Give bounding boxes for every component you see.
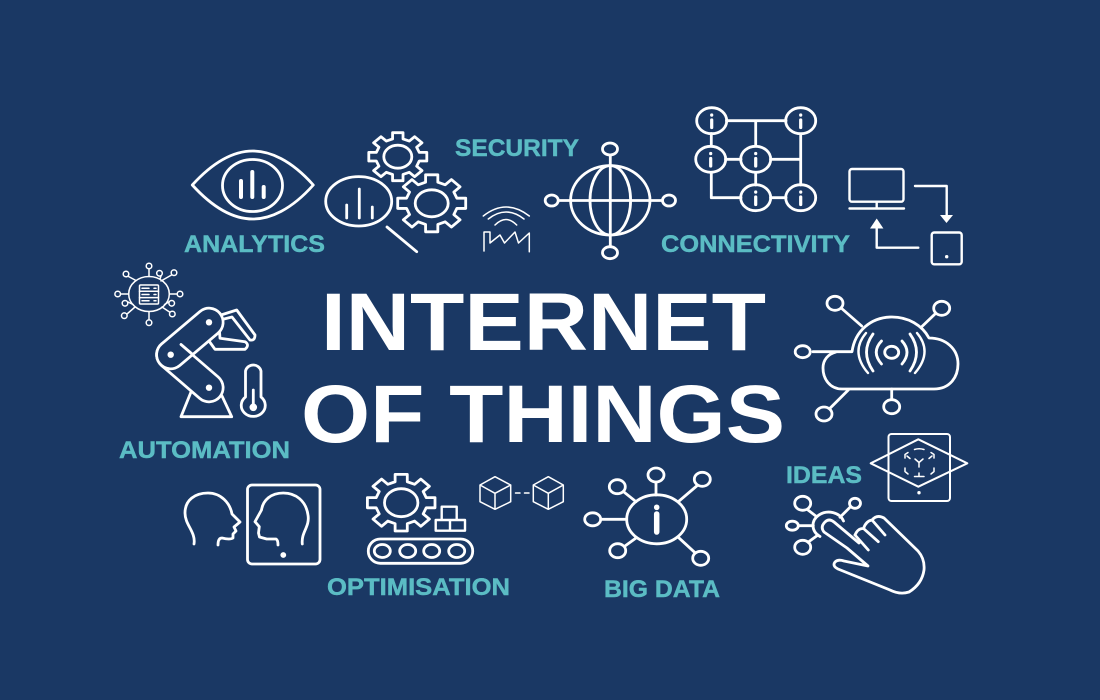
icon: large gear: [398, 175, 466, 232]
icon: smart factory: [483, 207, 529, 252]
title: INTERNET: [321, 277, 766, 368]
label: automation: AUTOMATION: [119, 437, 290, 464]
icon: globe with nodes: [545, 143, 676, 259]
icon: magnifier with bar chart: [326, 177, 417, 252]
title: OF THINGS: [301, 369, 785, 460]
icon: eye with bar chart: [192, 151, 313, 219]
label: connectivity: CONNECTIVITY: [661, 231, 850, 258]
icon: framed head on tablet: [248, 485, 320, 564]
label: analytics: ANALYTICS: [184, 231, 325, 258]
icon: thermometer: [241, 365, 265, 416]
icon: linked cubes: [480, 477, 563, 509]
label: security: SECURITY: [455, 135, 579, 162]
label: big data: BIG DATA: [604, 576, 720, 603]
icon: connected info network: [696, 108, 816, 211]
label: ideas: IDEAS: [786, 462, 862, 489]
icon: human head profile: [185, 493, 240, 545]
title: [301, 277, 785, 460]
icon: gear on conveyor belt with boxes: [367, 474, 473, 563]
icon: big data hub: [585, 468, 710, 565]
icon: cloud with signal: [795, 296, 958, 421]
label: optimisation: OPTIMISATION: [327, 574, 510, 601]
icon: tablet with diamond: [871, 434, 967, 501]
icon: robot arm: [168, 310, 255, 417]
icon: server hub: [115, 263, 183, 326]
icon: monitor and tablet sync: [850, 169, 962, 264]
icon: hand touching network: [786, 496, 924, 593]
icon: small gear: [369, 133, 427, 181]
